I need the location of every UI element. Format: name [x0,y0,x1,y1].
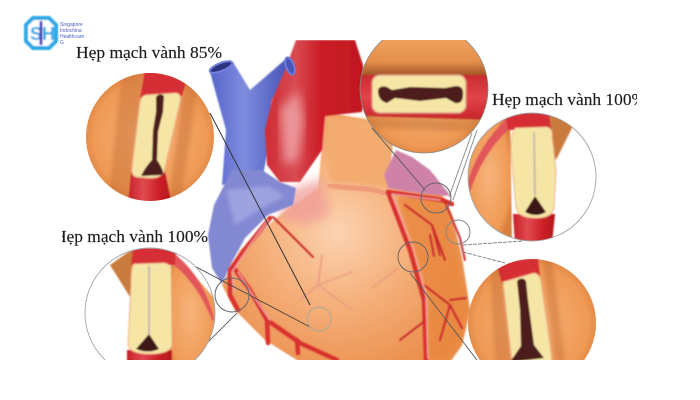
upper heart shading [326,116,392,186]
heart illustration [84,40,596,360]
inset: top left, 85% stenosis [86,70,214,205]
logo wordmark [60,22,84,46]
small callout rings [215,183,470,331]
logo wordmark: G [60,40,64,46]
right atrium, lavender [208,170,296,284]
inset: right top, 100% occlusion [466,112,596,244]
superior vena cava, blue vessels [210,58,295,185]
pulmonary appendage, pink [384,150,450,196]
inset: top centre [360,40,488,154]
coronary arteries [230,192,466,360]
atrium highlight [226,186,285,225]
vein opening, left [208,60,234,74]
logo [26,18,56,48]
label: 85%: Hẹp mạch vành 85% [76,43,222,62]
shaded right side of heart [396,194,468,360]
aorta [265,40,364,182]
pink tissue under aorta [280,178,330,225]
groove band [328,185,386,194]
logo: H [42,24,55,44]
logo wordmark: Singapore [60,22,83,28]
inset: left bottom, 100% occlusion [84,248,216,360]
label: right 100%: Hẹp mạch vành 100% [492,90,646,109]
logo wordmark: Indochina [60,28,82,34]
logo wordmark: Healthcare [60,34,84,40]
vein opening, right [284,56,296,76]
heart body [222,112,470,362]
label: left 100%: Hẹp mạch vành 100% [54,227,208,246]
leader lines [183,113,523,360]
logo: S [30,24,42,44]
inset: right bottom [468,259,596,360]
